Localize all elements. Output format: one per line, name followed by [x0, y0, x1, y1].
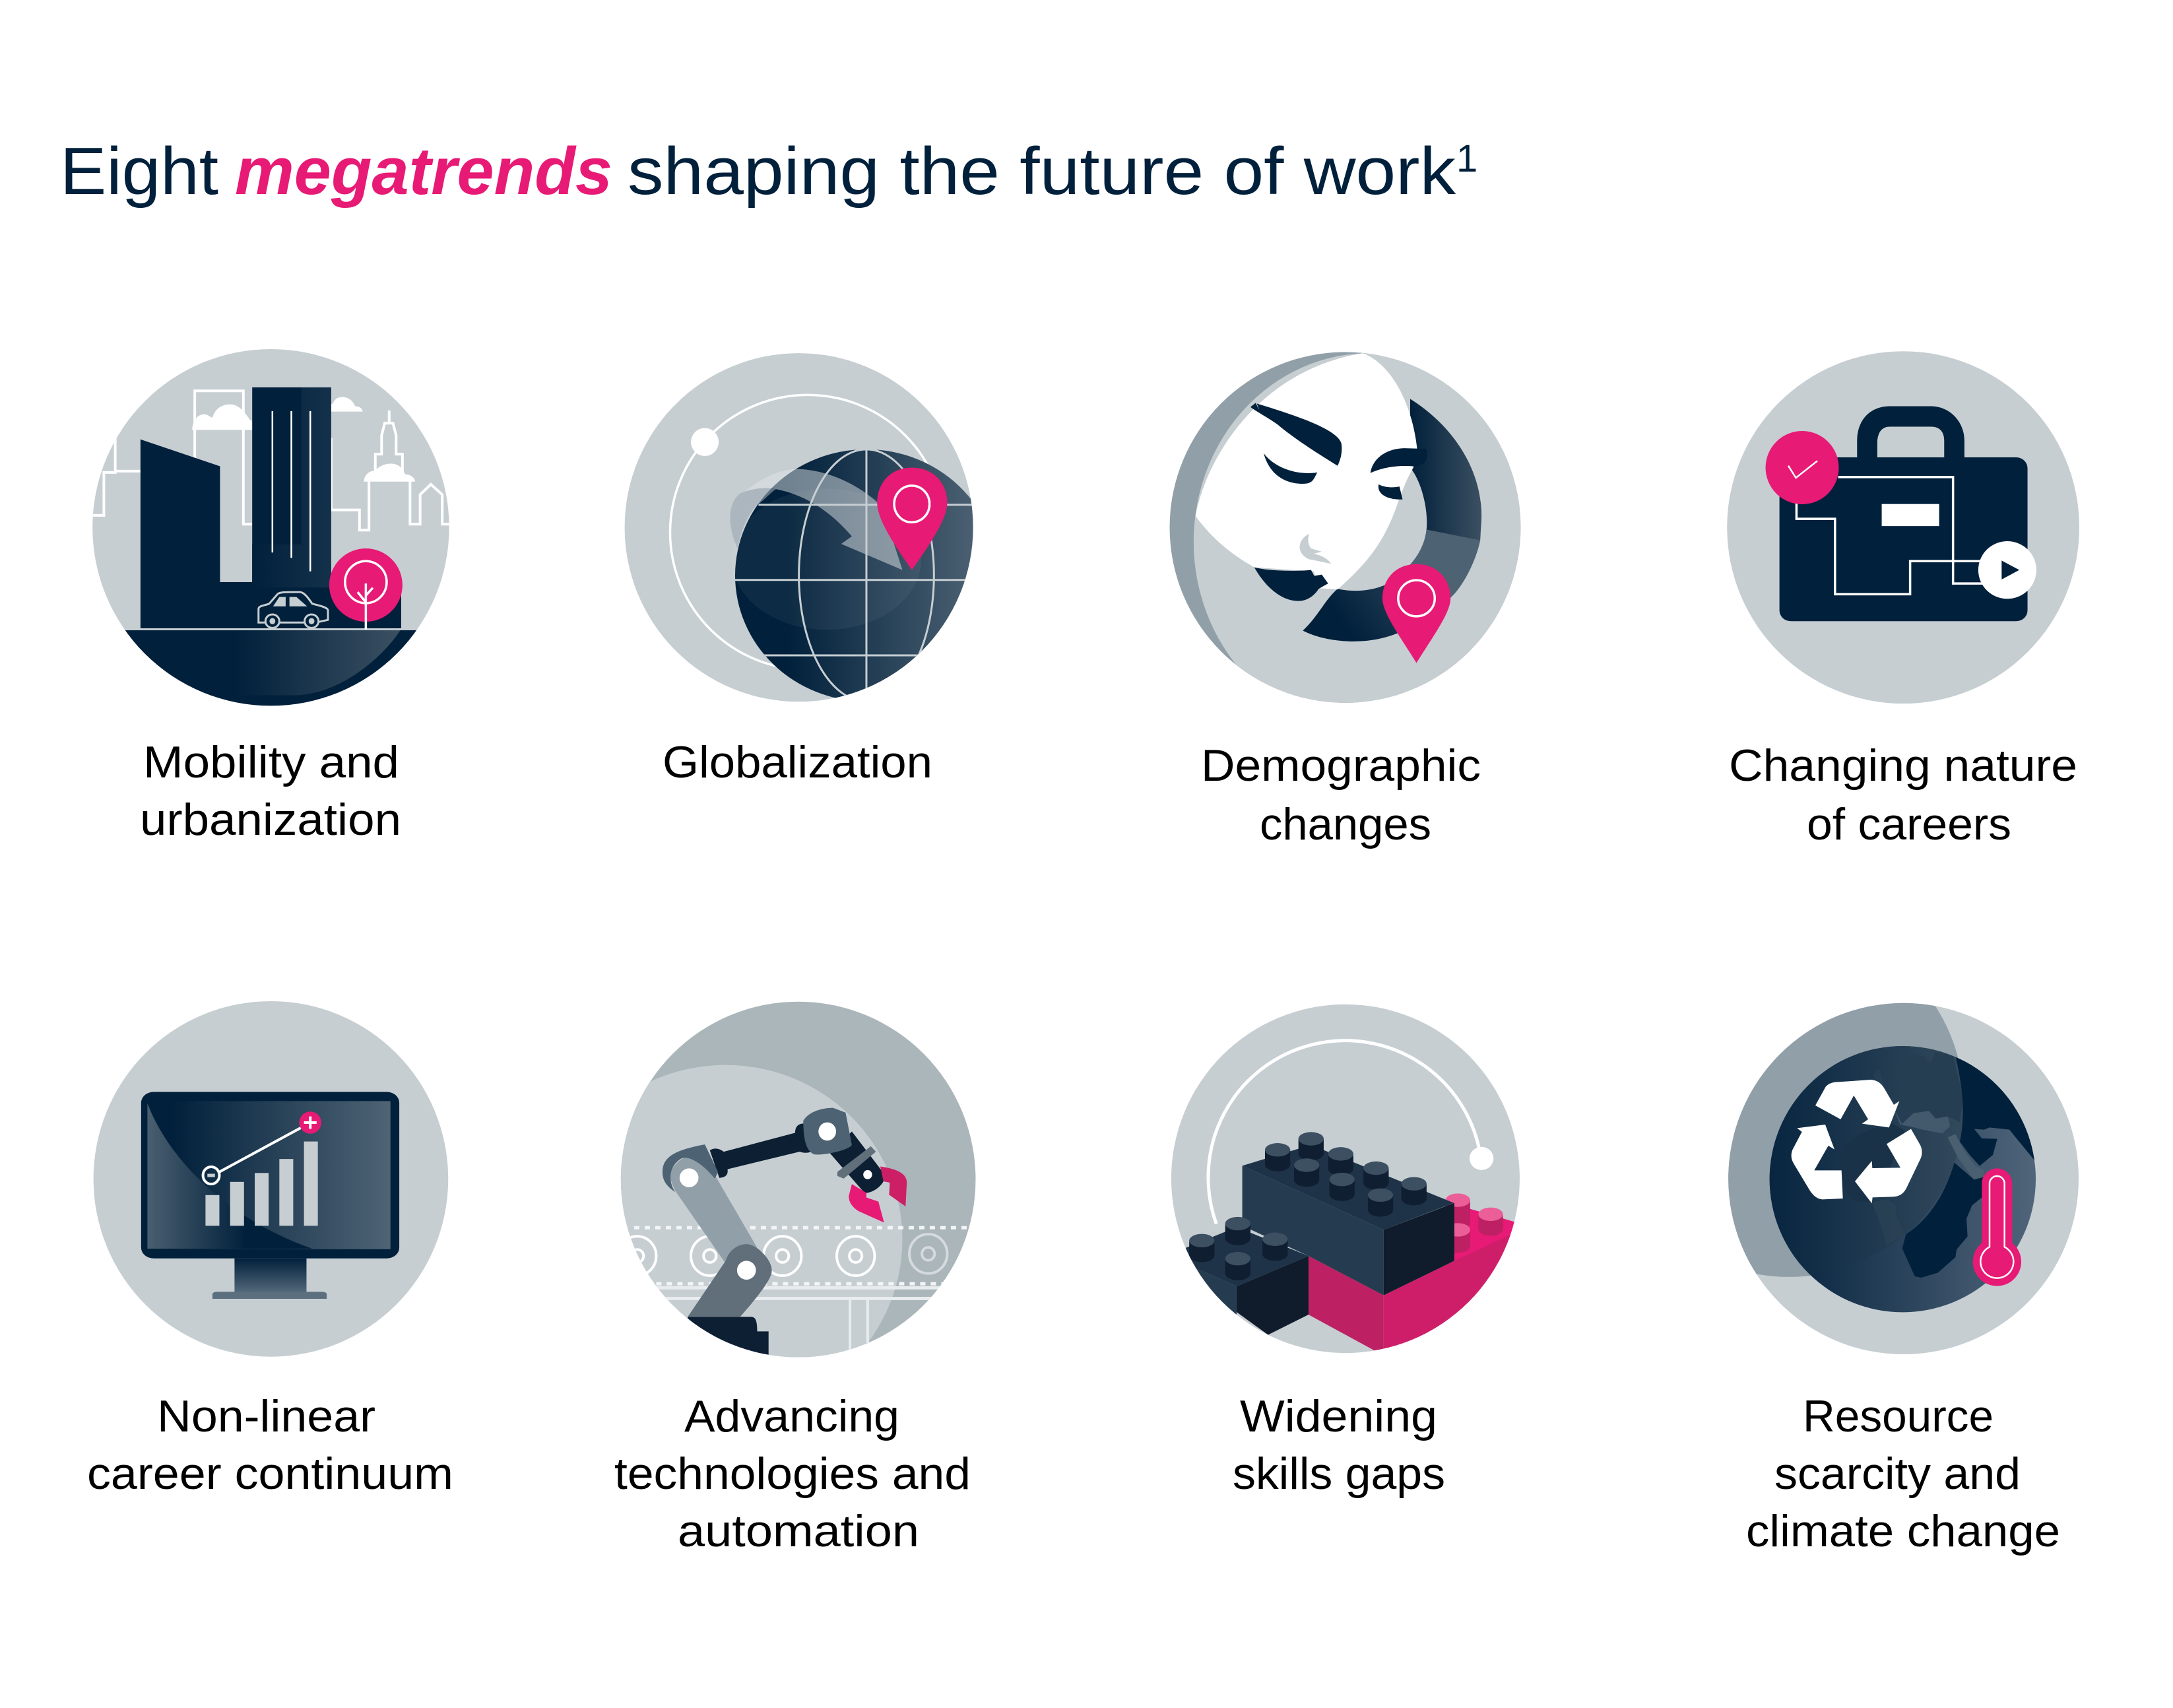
- panel: advancing technologies and automation: [615, 1002, 975, 1547]
- label: scarcity and: [1774, 1449, 2021, 1499]
- label: [1746, 1391, 2060, 1556]
- label: Changing nature: [1729, 740, 2077, 791]
- label: [1233, 1391, 1445, 1499]
- label: [140, 737, 401, 845]
- label: climate change: [1746, 1506, 2060, 1556]
- icon: earth with recycling symbol: [1755, 1043, 2039, 1312]
- label: of careers: [1807, 799, 2011, 849]
- icon: monitor with chart: [94, 1001, 448, 1357]
- label: automation: [678, 1506, 919, 1556]
- icon: building blocks: [1167, 1004, 1520, 1360]
- title: shaping the future of work: [628, 135, 1456, 209]
- icon: globe with pin: [625, 353, 998, 702]
- title: megatrends: [235, 135, 612, 209]
- label: Mobility and: [143, 737, 399, 787]
- label: urbanization: [140, 795, 401, 845]
- icon: thermometer: [1973, 1168, 2021, 1286]
- label: Demographic: [1201, 740, 1481, 791]
- icon: robot arm and conveyor: [620, 1002, 975, 1357]
- label: [1201, 740, 1481, 849]
- icon: city skyline: [91, 349, 452, 711]
- title: Eight: [60, 135, 218, 209]
- icon: car: [259, 592, 328, 628]
- label: Globalization: [663, 737, 932, 787]
- panel: mobility and urbanization: [91, 349, 452, 845]
- icon: play badge: [1978, 541, 2036, 599]
- icon: backdrop circle: [1728, 1003, 2079, 1354]
- panel: globalization: [625, 353, 998, 787]
- label: [614, 1391, 971, 1556]
- label: changes: [1260, 799, 1431, 849]
- label: Advancing: [684, 1391, 899, 1441]
- icon: tree: [329, 548, 403, 629]
- icon: recycling arrows: [1792, 1080, 1922, 1203]
- panel: demographic changes: [1170, 352, 1545, 849]
- panel: changing nature of careers: [1727, 351, 2079, 849]
- title: [60, 135, 1477, 209]
- panel: widening skills gaps: [1167, 1004, 1520, 1499]
- icon: pin: [1382, 564, 1450, 663]
- label: skills gaps: [1233, 1449, 1445, 1499]
- label: Non-linear: [157, 1391, 375, 1441]
- label: [1729, 740, 2077, 849]
- label: technologies and: [614, 1449, 971, 1499]
- icon: check badge: [1766, 431, 1839, 504]
- label: Widening: [1240, 1391, 1437, 1441]
- panel: resource scarcity and climate change: [1728, 1003, 2079, 1556]
- panel: non-linear career continuum: [87, 1001, 453, 1499]
- label: career continuum: [87, 1449, 453, 1499]
- icon: briefcase: [1727, 351, 2079, 704]
- title: 1: [1456, 137, 1477, 180]
- icon: robot arm: [663, 1108, 907, 1317]
- icon: pin: [877, 468, 947, 570]
- icon: face with pin: [1169, 352, 1520, 703]
- label: Resource: [1803, 1391, 1994, 1441]
- label: [87, 1391, 453, 1499]
